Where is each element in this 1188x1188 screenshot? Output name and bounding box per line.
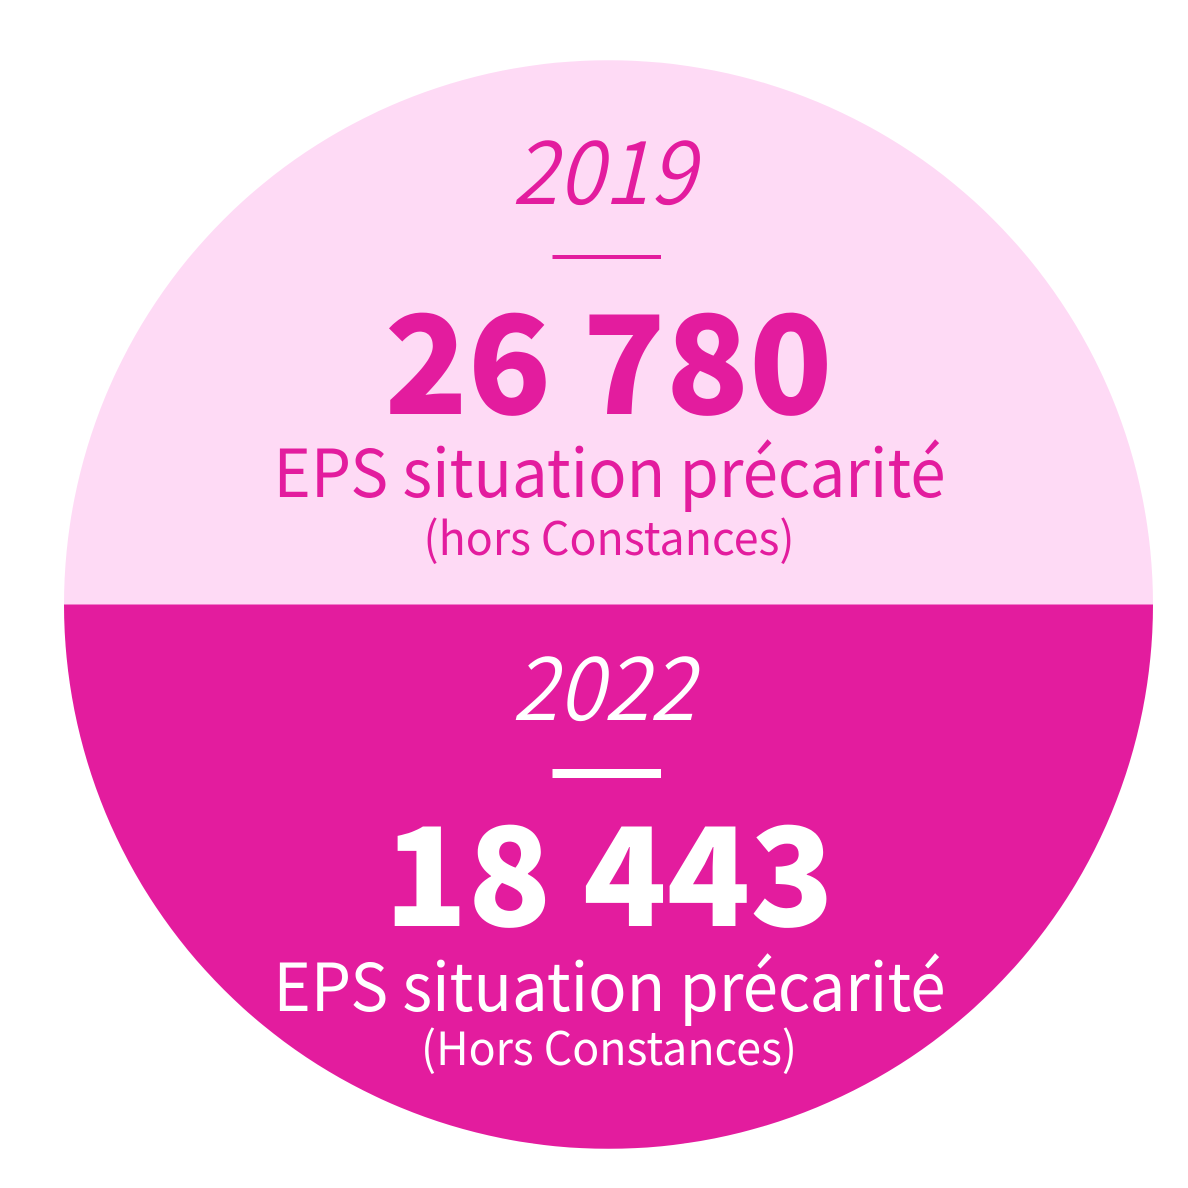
panel: 2022 [64,604,1153,1149]
value 18 443: 18 443 [384,768,834,966]
year divider [552,769,661,778]
label Hors Constances: (Hors Constances) [421,1013,797,1079]
label EPS: EPS situation précarité [274,421,946,517]
label hors Constances: (hors Constances) [424,503,794,569]
year 2019: 2019 [512,103,703,230]
lower half of circle [64,604,1153,1149]
panel: 2019 [64,60,1153,605]
upper half of circle [64,60,1153,605]
label EPS: EPS situation précarité [274,935,946,1031]
year 2022: 2022 [512,619,701,746]
value 26 780: 26 780 [384,256,832,454]
year divider [552,255,661,259]
